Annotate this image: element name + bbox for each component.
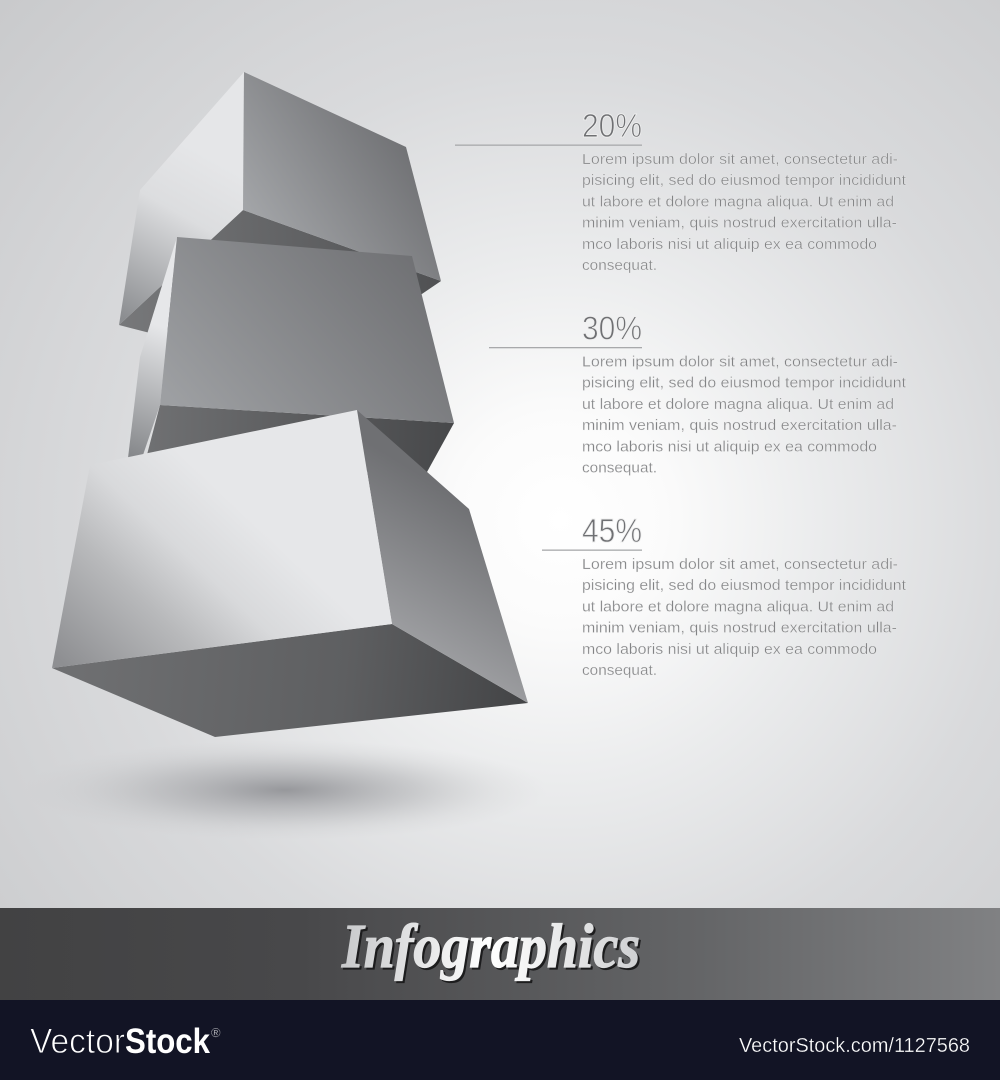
body text 20%	[582, 151, 907, 274]
bottom cube	[52, 410, 528, 737]
bottom cube front face	[52, 410, 392, 668]
bottom cube underside	[52, 624, 528, 737]
middle cube front face	[160, 237, 454, 423]
footer bar	[0, 1000, 1000, 1080]
body text 20%: ut labore et dolore magna aliqua. Ut enim ad	[582, 193, 894, 210]
logo: VectorStock: Vector	[30, 1022, 125, 1061]
credit: image id: VectorStock.com/1127568	[739, 1035, 970, 1057]
body text 30%: consequat.	[582, 460, 657, 476]
body text 30%: minim veniam, quis nostrud exercitation ulla-	[582, 417, 897, 434]
body text 30%: pisicing elit, sed do eiusmod tempor incididunt	[582, 375, 907, 392]
block: 30%	[489, 310, 907, 476]
middle cube	[128, 237, 454, 472]
leader line 45%	[542, 550, 642, 551]
body text 30%: Lorem ipsum dolor sit amet, consectetur adi-	[582, 354, 898, 370]
body text 45%: ut labore et dolore magna aliqua. Ut enim ad	[582, 598, 894, 615]
body text 30%: mco laboris nisi ut aliquip ex ea commodo	[582, 438, 877, 455]
logo: VectorStock: Stock	[125, 1022, 210, 1061]
body text 45%: pisicing elit, sed do eiusmod tempor incididunt	[582, 577, 907, 594]
middle cube left face	[128, 237, 177, 458]
body text 45%: minim veniam, quis nostrud exercitation ulla-	[582, 620, 897, 637]
top cube right face	[243, 72, 441, 281]
title: Infographics: Infographics	[341, 913, 640, 981]
percentage 30%: 30%	[582, 310, 642, 346]
body text 20%: mco laboris nisi ut aliquip ex ea commodo	[582, 236, 877, 253]
block: 45%	[542, 512, 907, 679]
body text 20%: consequat.	[582, 257, 657, 274]
top cube	[119, 72, 441, 333]
body text 45%: mco laboris nisi ut aliquip ex ea commodo	[582, 641, 877, 658]
bottom cube right face	[357, 410, 528, 703]
body text 45%: Lorem ipsum dolor sit amet, consectetur adi-	[582, 556, 898, 573]
leader line 20%	[455, 144, 642, 146]
title: Infographics: Infographics	[343, 915, 642, 983]
title band	[0, 908, 1000, 1000]
body text 20%: pisicing elit, sed do eiusmod tempor incididunt	[582, 172, 907, 189]
body text 30%	[582, 354, 907, 476]
logo: VectorStock: ®	[211, 1025, 221, 1040]
percentage 20%: 20%	[582, 107, 642, 144]
percentage 45%: 45%	[582, 512, 642, 549]
block: 20%	[455, 107, 907, 274]
body text 45%	[582, 556, 907, 679]
logo: VectorStock	[30, 1022, 221, 1061]
middle cube bottom face	[143, 405, 454, 472]
leader line 30%	[489, 347, 642, 348]
top cube left face	[119, 72, 244, 325]
body text 30%: ut labore et dolore magna aliqua. Ut enim ad	[582, 396, 894, 413]
body text 20%: minim veniam, quis nostrud exercitation ulla-	[582, 215, 897, 232]
body text 45%: consequat.	[582, 662, 657, 679]
body text 20%: Lorem ipsum dolor sit amet, consectetur adi-	[582, 151, 898, 168]
top cube bottom face	[119, 210, 441, 333]
floor shadow	[23, 740, 547, 840]
